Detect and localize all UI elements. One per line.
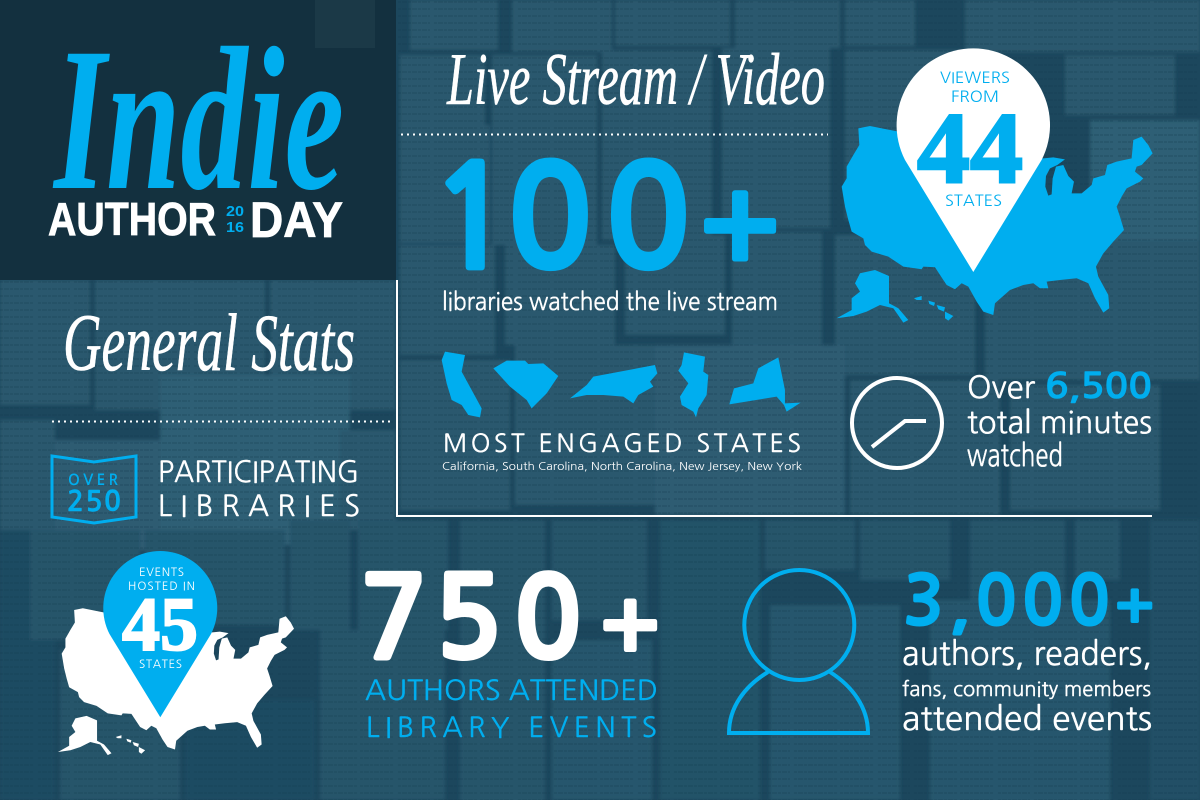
icon: North Carolina [570,365,657,403]
pin text: states: STATES [139,658,182,670]
caption: authors attended library events: AUTHORS ATTENDED [365,677,658,705]
caption: authors, readers, fans, community members attended events: attended events [902,703,1152,735]
stat: participating libraries: PARTICIPATING [158,458,359,487]
icon: California [442,352,482,417]
frame lines [397,280,1152,516]
icon: person outline [729,570,868,733]
logo word: Day: DAY [250,192,343,248]
pin text: events hosted in: EVENTS [139,566,184,578]
heading: General Stats: General Stats [63,297,355,388]
pin number: 44: 44 [917,92,1023,205]
icon: white map pin [897,48,1050,272]
caption: authors, readers, fans, community members attended events: fans, community members [902,679,1151,699]
caption: authors attended library events: LIBRARY EVENTS [366,714,657,742]
caption: authors, readers, fans, community members attended events [902,638,1152,735]
logo word: Indie: Indie [53,6,344,233]
pin number: 45: 45 [122,583,198,667]
panel: dark logo background [0,0,396,280]
icon: South Carolina [493,361,558,408]
icons: five most engaged states [442,352,801,417]
map: USA blue with viewers pin [837,48,1153,323]
stat: over 6,500 total minutes watched: Over [967,372,1036,403]
dotted divider [401,134,828,136]
icon: clock [852,378,942,468]
icon: New York [729,357,801,412]
heading: most engaged states: MOST ENGAGED STATES [443,431,801,456]
big stat: 100+: 100 [429,150,691,290]
stat: over 6,500 total minutes watched: watched [967,440,1063,471]
big stat: 3,000+: + [1115,578,1154,637]
pin text: viewers from [940,71,1010,105]
caption: authors attended library events [365,677,658,742]
pin text: viewers from: VIEWERS [940,71,1010,86]
big stat: 3,000+: 3,000 [903,569,1110,636]
caption: libraries watched the live stream: libraries watched the live stream [442,290,778,314]
stat: participating libraries: LIBRARIES [158,492,360,521]
pin text: viewers from: FROM [951,90,999,105]
big stat: 750+: + [600,583,660,674]
pin text: states: STATES [945,194,1002,209]
icon: New Jersey [678,352,708,417]
map: USA white with events pin [58,551,294,755]
logo word: Author: AUTHOR [48,193,216,245]
pin text: events hosted in [128,566,195,592]
big stat: 100+: + [699,168,781,292]
caption: authors, readers, fans, community members attended events: authors, readers, [902,638,1152,670]
title: Indie Author Day logo [48,6,344,248]
icon: blue map pin [103,551,217,717]
list of states: California, South Carolina, North Carolina, New Jersey, New York [442,461,803,472]
map: continental US and territories [58,608,294,755]
stat: over 6,500 total minutes watched: 6,500 [1045,370,1152,404]
dotted divider [52,420,392,422]
icon: open book badge, over 250: OVER [68,473,119,488]
heading: Live Stream / Video: Live Stream / Video [446,39,825,121]
logo year: 2016: 20 [226,203,244,220]
icon: open book badge, over 250 [52,456,136,523]
icon: open book badge, over 250: 250 [67,488,121,516]
pin text: events hosted in: HOSTED IN [128,580,195,592]
stat: participating libraries [158,458,360,521]
stat: over 6,500 total minutes watched [967,370,1152,471]
logo year: 2016 [226,203,244,236]
stat: over 6,500 total minutes watched: total minutes [967,407,1152,438]
logo year: 2016: 16 [226,219,244,236]
map: continental US and territories [837,126,1153,323]
big stat: 750+: 750 [360,564,582,675]
